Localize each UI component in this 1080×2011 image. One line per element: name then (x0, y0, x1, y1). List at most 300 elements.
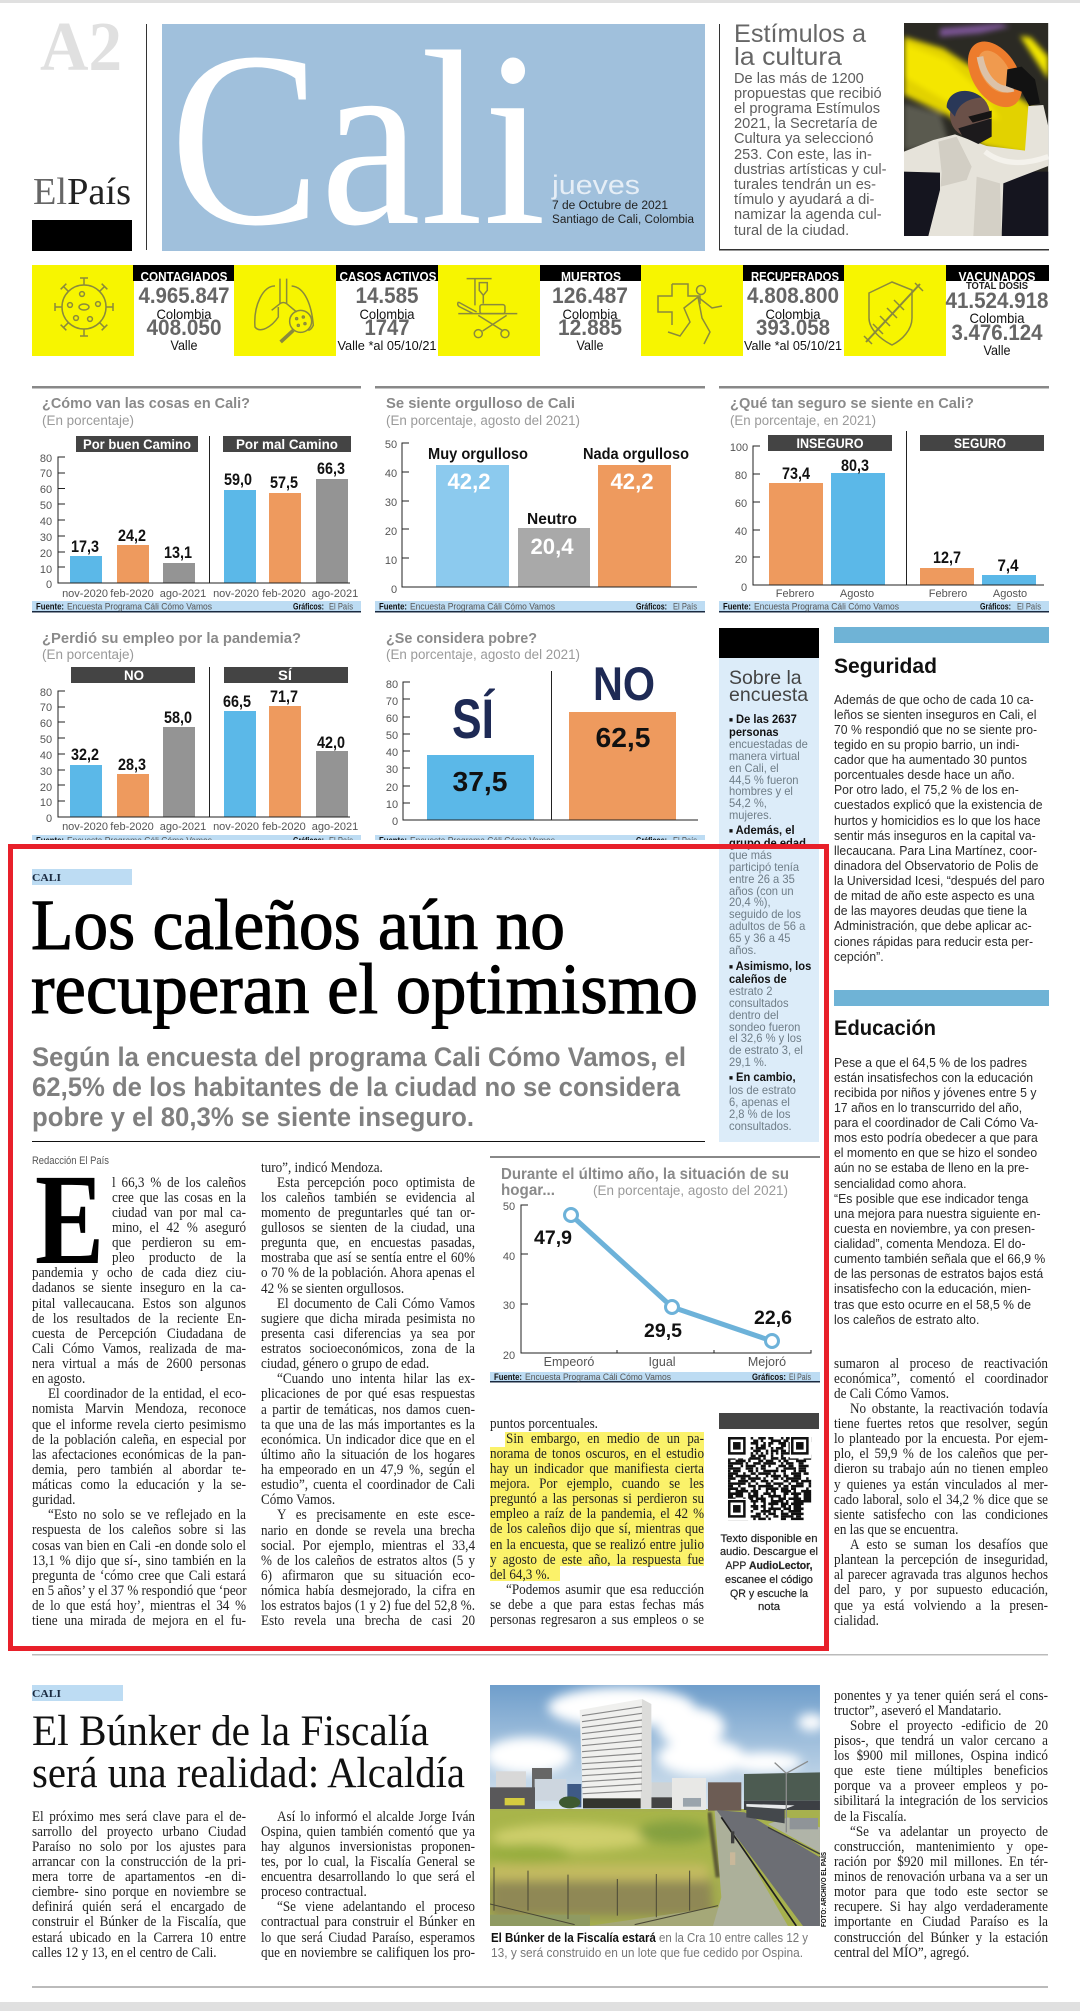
article column 2: estudio”, cuenta el coordinador de Cali (261, 1477, 475, 1493)
bunker story column 3: ponentes y ya tener quién será el cons- (834, 1688, 1048, 1704)
survey point 3: 29,1 %. (729, 1055, 767, 1069)
educacion body: “Es posible que ese indicador tenga (834, 1191, 1028, 1206)
chart title: (En porcentaje, agosto del 2021) (593, 1183, 788, 1198)
value labels: 20,4 (530, 534, 574, 559)
seguridad body: Además de que ocho de cada 10 ca- (834, 692, 1034, 706)
survey point 4: 6, apenas el (729, 1095, 790, 1109)
survey point 2: que más (729, 848, 772, 862)
survey point 3: caleños de (729, 972, 787, 986)
article column 4: en las que se encuentra. (834, 1522, 958, 1538)
culture body text: 2021, la Secretaría de (734, 116, 878, 132)
culture heading: la cultura (734, 43, 842, 71)
value labels: 24,2 (118, 527, 146, 545)
bunker story column 3: construcción del Búnker y la estación (834, 1930, 1048, 1946)
chart title: ¿Qué tan seguro se siente en Cali? (730, 395, 974, 412)
bunker story column 1: ciembre- sino porque en noviembre se (32, 1884, 246, 1900)
value labels (782, 457, 1019, 575)
data values: 47,9 (534, 1228, 572, 1249)
bunker story column 3: sibilitará la integración de los servicios (834, 1793, 1048, 1809)
subheadline: pobre y el 80,3% se siente inseguro. (32, 1102, 474, 1132)
stat: vacunados: 3.476.124 (952, 320, 1043, 345)
main headline: Los caleños aún no (31, 885, 565, 965)
value labels: 32,2 (71, 746, 99, 764)
second headline (32, 1708, 465, 1797)
chart title: ¿Cómo van las cosas en Cali? (42, 395, 250, 412)
category labels: Neutro (527, 511, 577, 528)
axis labels: nov-2020 (62, 588, 108, 600)
article column 3: preguntó a las personas si perdieron su (490, 1491, 704, 1507)
seguridad body: tegido en su propio barrio, un indi- (834, 737, 1019, 752)
article column 2 (261, 1160, 475, 1629)
article column 2: a partir de temáticas, nos damos cuen- (261, 1402, 475, 1418)
article column 2: presenta casi diferencias ya sea por (261, 1326, 475, 1342)
axis labels: 10 (386, 799, 398, 811)
drop cap: E (35, 1148, 104, 1292)
big labels (452, 657, 655, 750)
photo: empty lot with tower (485, 1685, 825, 1926)
stat: casos activos: 14.585 (356, 283, 418, 308)
survey point 2: entre 26 a 35 (729, 872, 795, 886)
article column 1: máticas como la educación y la se- (32, 1477, 246, 1493)
main headline: recuperan el optimismo (31, 949, 698, 1029)
axis labels: 20 (735, 554, 747, 566)
survey point 1: manera virtual (729, 749, 800, 763)
educacion body: Pese a que el 64,5 % de los padres (834, 1054, 1027, 1070)
value labels (71, 460, 345, 562)
article column 3: personas regresaron a sus empleos o se (490, 1612, 704, 1628)
second section tag (32, 1685, 123, 1701)
article column 1: El coordinador de la entidad, el eco- (48, 1386, 246, 1402)
QR caption: escanee el código (725, 1574, 813, 1586)
QR caption: APP AudioLector, (726, 1560, 812, 1572)
value labels: 42,2 (448, 469, 490, 494)
bunker story column 1: mera torre de apartamentos -en di- (32, 1869, 246, 1885)
axis labels: nov-2020 (62, 821, 108, 833)
QR caption (720, 1533, 818, 1613)
chart panel: como van las cosas (32, 386, 361, 612)
educacion body: están insatisfechos con la educación (834, 1070, 1033, 1085)
data values: 22,6 (754, 1308, 792, 1329)
grass field (485, 1811, 721, 1926)
survey point 3: el 32,6 % y los (729, 1031, 802, 1045)
bunker story column 3: recupere. Si hay algo verdaderamente (834, 1899, 1048, 1915)
bunker story column 3: de la Fiscalía. (834, 1808, 907, 1824)
group headers (76, 436, 351, 452)
article column 4: plantean la percepción de inseguridad, (834, 1552, 1048, 1568)
value labels: 71,7 (270, 688, 298, 706)
article column 2: sugiere que dicha mirada pesimista no (261, 1311, 475, 1327)
icon: hospital stretcher (458, 279, 517, 338)
group headers: SÍ (278, 668, 293, 683)
educacion body: tras que esto ocurre en el 58,5 % de (834, 1296, 1031, 1312)
survey point 1: en Cali, el (729, 761, 779, 775)
QR caption: QR y escuche la (730, 1588, 809, 1600)
article column 2: Esto revela una brecha de casi 20 (261, 1613, 475, 1629)
stat: contagiados: CONTAGIADOS (140, 269, 228, 284)
stat: vacunados (844, 265, 1049, 358)
value labels: 66,5 (223, 693, 251, 711)
article column 3: en la encuesta, que se realizó entre julio (490, 1536, 704, 1552)
article column 1: nomista Marvin Mendoza, reconoce (32, 1401, 246, 1417)
stat: recuperados (641, 265, 844, 356)
survey point 3: ■ Asimismo, los (729, 959, 811, 973)
article column 2: ha empeorado en un 47,9 %, según el (261, 1462, 475, 1478)
bunker story column 3: pisos-, que tendrá un valor cercano a (834, 1733, 1048, 1749)
source bar: Encuesta Programa Cáli Cómo Vamos (410, 602, 555, 612)
source bar clipped by frame: Gráficos: (293, 836, 324, 846)
article column 3: mejora. Por ejemplo, cuando se les (490, 1476, 704, 1492)
article column 3: del 64,3 %. (490, 1567, 550, 1583)
article column 3: “Podemos asumir que esa reducción (506, 1582, 704, 1598)
axis labels: nov-2020 (213, 821, 259, 833)
axis labels: 0 (392, 816, 398, 828)
bunker story column 3: central del MÍO”, agregó. (834, 1945, 969, 1961)
educacion body: para el coordinador de Cali Cómo Va- (834, 1115, 1038, 1130)
stat: muertos: Colombia (562, 306, 618, 322)
article column 4: y quienes ya están vinculados al mer- (834, 1476, 1048, 1492)
educacion colour bar (834, 990, 1049, 1006)
culture body text: dustrias artísticas y cul- (734, 162, 886, 178)
survey point 1: mujeres. (729, 808, 772, 822)
photo caption: El Búnker de la Fiscalía estará en la Cra 10 entre calles 12 y (491, 1931, 809, 1945)
survey panel title: Sobre la (729, 667, 802, 689)
category labels (428, 446, 689, 528)
article column 2: plicaciones de por qué esas respuestas (261, 1386, 475, 1402)
culture body text: Cultura ya seleccionó (734, 131, 874, 147)
bunker story column 3: motor para que todo este sector se (834, 1884, 1048, 1900)
article column 1: mino, el 42 % aseguró (112, 1220, 246, 1236)
pedestrians (730, 1831, 735, 1865)
seguridad body: porcentuales desde hace un año. (834, 767, 1015, 782)
value labels (71, 688, 345, 774)
educacion body: mos esto podría obedecer a que para (834, 1130, 1038, 1145)
bunker story column 3: tructor”, aseveró el Mandatario. (834, 1703, 1001, 1719)
article column 1: tiene una mirada de mejora en el fu- (32, 1613, 246, 1629)
bars (427, 712, 676, 820)
chart title: ¿Se considera pobre? (386, 630, 537, 647)
article column 2: económica. Un indicador dice que en el (261, 1432, 475, 1448)
page number A2: A2 (40, 9, 122, 86)
value labels: 73,4 (782, 465, 811, 483)
article column 4: de Cali Cómo Vamos. (834, 1386, 949, 1402)
bunker story column 3 (834, 1688, 1048, 1961)
seguridad body: dinadora del Observatorio de Polis de (834, 858, 1038, 873)
article column 3: hay un indicador que manifiesta cierta (490, 1461, 704, 1477)
section masthead: Cali (162, 1, 705, 278)
survey point 2: participó tenía (729, 860, 799, 874)
category labels: Nada orgulloso (583, 446, 689, 463)
value labels: 17,3 (71, 538, 99, 556)
stat: vacunados: Valle (984, 342, 1011, 358)
value labels: 80,3 (841, 457, 869, 475)
value labels: 13,1 (164, 544, 192, 562)
educacion body: cuesta en noviembre, ya con presen- (834, 1221, 1035, 1236)
icon: lungs (255, 279, 313, 342)
article column 4: No obstante, la reactivación todavía (850, 1401, 1048, 1417)
axis labels: 80 (40, 687, 52, 699)
survey point 3: consultados (729, 996, 789, 1010)
value labels: 59,0 (224, 471, 252, 489)
axis labels: 40 (40, 516, 52, 528)
article column 2: “Cuando uno intenta hilar las ex- (277, 1371, 475, 1387)
axis labels: 0 (46, 579, 52, 591)
photo caption: 13, y será construido en un lote que fue cedido por Ospina. (491, 1946, 803, 1960)
stat: recuperados: Valle *al 05/10/21 (744, 338, 842, 353)
source bar (32, 601, 361, 612)
article column 4: que ya está volviendo a la presen- (834, 1598, 1048, 1614)
value labels: 58,0 (164, 709, 192, 727)
group headers (768, 435, 1044, 451)
stat: recuperados: Colombia (766, 306, 821, 322)
article column 2: % de los caleños de estratos altos (5 y (261, 1553, 475, 1569)
axis labels: 30 (386, 764, 398, 776)
seguridad body: leños se sienten inseguros en Cali, el (834, 707, 1036, 722)
photo: dancer with orange hat (904, 23, 1048, 237)
article column 1: cosas van bien en Cali -en donde solo el (32, 1538, 246, 1554)
educacion body: insatisfecho con la educación, mien- (834, 1281, 1031, 1296)
axis labels: 10 (40, 797, 52, 809)
subheadline: Según la encuesta del programa Cali Cómo Vamos, el (32, 1042, 686, 1072)
article column 1 (32, 1174, 247, 1629)
source bar: Gráficos: (636, 602, 667, 612)
bunker story column 1: sarrollo del proyecto urbano Ciudad (32, 1824, 246, 1840)
survey point 3 (729, 959, 811, 1069)
axis labels: 30 (40, 766, 52, 778)
seguridad colour bar (834, 627, 1049, 643)
stat: vacunados: Colombia (970, 310, 1025, 326)
article column 4: plo, el 59,9 % de los caleños que per- (834, 1446, 1048, 1462)
article column 1: cree que las cosas en la (112, 1190, 246, 1206)
stat: recuperados: 393.058 (756, 315, 830, 340)
source bar (490, 1372, 820, 1383)
educacion body: recibida por niños y jóvenes entre 5 y (834, 1085, 1036, 1100)
place: Santiago de Cali, Colombia (552, 214, 695, 226)
bunker story column 2: “Se viene adelantando el proceso (277, 1899, 475, 1915)
article column 1: pleo producto de la (112, 1250, 246, 1266)
article column 3 (490, 1416, 704, 1628)
axis labels: 70 (40, 468, 52, 480)
bunker story column 2: contractual para construir el Búnker en (261, 1914, 475, 1930)
article column 2: los caleños también se evidencia al (261, 1190, 475, 1206)
value labels: 42,0 (317, 734, 345, 752)
axis labels: 30 (503, 1300, 515, 1312)
survey point 4: consultados. (729, 1119, 792, 1133)
article column 3: puntos porcentuales. (490, 1416, 598, 1432)
survey point 3: dentro del (729, 1008, 779, 1022)
axis labels: 80 (40, 453, 52, 465)
article column 1: que el informe revela cierto pesimismo (32, 1416, 246, 1432)
photo credit: FOTO: ARCHIVO EL PAÍS (819, 1852, 828, 1927)
source bar (375, 601, 705, 612)
survey point 2: grupo de edad (729, 836, 806, 850)
bunker story column 1: calles 12 y 13, en el centro de Cali. (32, 1945, 217, 1961)
source bar clipped by frame (375, 835, 705, 840)
seguridad body: Por otro lado, el 75,2 % de los en- (834, 782, 1019, 797)
source bar clipped by frame: Gráficos: (636, 836, 667, 846)
article column 2: gullosos se sienten de la ciudad, una (261, 1220, 475, 1236)
seguridad body: la Universidad Icesi, “después del paro (834, 873, 1045, 888)
category labels: Igual (648, 1355, 676, 1369)
source bar: Gráficos: (293, 602, 324, 612)
axis labels: 30 (385, 497, 397, 509)
bunker story column 2: hay algunos inversionistas proponen- (261, 1839, 475, 1855)
culture body text (734, 70, 886, 239)
date: 7 de Octubre de 2021 (552, 200, 668, 212)
black box under logo (32, 220, 132, 251)
culture body text: turales tendrán un es- (734, 177, 876, 193)
article column 1: en agosto. (32, 1371, 85, 1387)
educacion body: una mejora para nuestra siguiente en- (834, 1206, 1041, 1221)
bunker story column 1: El próximo mes será clave para el de- (32, 1808, 246, 1824)
article column 2: Cómo Vamos. (261, 1492, 335, 1508)
survey point 2: adultos de 56 a (729, 919, 805, 933)
axis labels: feb-2020 (262, 821, 306, 833)
axis labels: ago-2021 (312, 588, 358, 600)
QR caption: nota (758, 1601, 781, 1613)
article column 2: nario en donde se revela una brecha (261, 1522, 475, 1538)
survey point 1: hombres y el (729, 784, 793, 798)
educacion body: 17 años en lo transcurrido del año, (834, 1100, 1022, 1115)
bunker story column 3: Sobre el proyecto -edificio de 20 (850, 1718, 1048, 1734)
category labels: Mejoró (748, 1355, 786, 1369)
axis labels: 80 (735, 470, 747, 482)
stat: recuperados: 4.808.800 (747, 283, 839, 308)
highlight behind paragraph (490, 1432, 704, 1581)
stat: vacunados: VACUNADOS (958, 269, 1036, 284)
big labels: SÍ (452, 687, 495, 750)
source bar clipped by frame (32, 835, 361, 840)
stat: casos activos: Colombia (360, 306, 415, 322)
green building and station (744, 1761, 820, 1832)
seguridad body: de las mayores deudas que tiene la (834, 903, 1027, 918)
survey point 2: 20,4 %), (729, 895, 771, 909)
seguridad body: sentir más inseguros en la capital va- (834, 828, 1036, 843)
data values: 29,5 (644, 1321, 682, 1342)
background buildings (490, 1768, 741, 1811)
subheadline: 62,5% de los habitantes de la ciudad no se considera (32, 1072, 681, 1102)
article column 4: cialidad. (834, 1613, 879, 1629)
article column 4: al parecer agravada tras algunos hechos (834, 1567, 1048, 1583)
culture body text: 253. Con este, las in- (734, 147, 872, 163)
source bar clipped by frame: El País (329, 836, 353, 846)
article column 4: siente satisfecho con las condiciones (834, 1507, 1048, 1523)
survey point 1 (729, 712, 808, 822)
weekday: jueves (551, 170, 640, 200)
icon: shield and syringe (864, 282, 923, 345)
article column 2: nómica había desmejorado, la cifra en (261, 1583, 475, 1599)
axis labels: 10 (385, 555, 397, 567)
axis labels (730, 442, 1027, 600)
article column 2: Y es precisamente en este esce- (277, 1507, 475, 1523)
seguridad body: cuestados explicó que la existencia de (834, 797, 1043, 812)
article column 2: estratos socioeconómicos, zona de la (261, 1341, 475, 1357)
top grey band (0, 0, 1080, 3)
survey point 1: ■ De las 2637 (729, 712, 797, 726)
article column 1: de lo que está hoy’, mientras el 34 % (32, 1598, 246, 1614)
group headers: NO (124, 668, 144, 683)
culture body text: el programa Estímulos (734, 101, 880, 117)
survey point 1: encuestadas de (729, 737, 808, 751)
survey point 1: 54,2 %, (729, 796, 767, 810)
educacion body (834, 1054, 1045, 1327)
axis labels: 60 (40, 718, 52, 730)
bunker story column 2: Así lo informó el alcalde Jorge Iván (277, 1808, 475, 1824)
survey point 3: estrato 2 (729, 984, 772, 998)
value labels: 28,3 (118, 756, 146, 774)
stat: contagiados: 4.965.847 (138, 283, 230, 308)
culture body text: namizar la agenda cul- (734, 207, 882, 223)
source bar: Fuente: (723, 602, 751, 612)
bunker story column 3: que este tiene múltiples beneficios (834, 1763, 1048, 1779)
QR code (728, 1437, 811, 1520)
group headers: Por mal Camino (236, 437, 338, 452)
bunker story column 2 (261, 1808, 475, 1961)
source bar: El País (789, 1372, 811, 1383)
stat: contagiados: 408.050 (146, 315, 222, 340)
value labels: 66,3 (317, 460, 345, 478)
bunker story column 3: “Se va adelantar un proyecto de (850, 1824, 1048, 1840)
axis labels: 0 (391, 584, 397, 596)
article column 1: dadanos se siente inseguro en la ca- (32, 1280, 246, 1296)
bunker story column 3: los $900 mil millones, Ospina indicó (834, 1748, 1048, 1764)
logo El País: ElPaís (33, 171, 131, 213)
survey point 4: los de estrato (729, 1083, 796, 1097)
second headline: será una realidad: Alcaldía (32, 1750, 465, 1797)
article column 2: Esta percepción poco optimista de (277, 1175, 475, 1191)
stat: contagiados: Colombia (156, 306, 212, 322)
survey point 2 (729, 823, 806, 957)
bunker story column 1: Paraíso no solo por los ajustes para (32, 1839, 246, 1855)
source bar: Encuesta Programa Cáli Cómo Vamos (67, 602, 212, 612)
axis labels: 20 (386, 782, 398, 794)
source bar (719, 601, 1049, 612)
stat: casos activos (234, 265, 438, 356)
axis labels: 70 (386, 696, 398, 708)
second headline: El Búnker de la Fiscalía (32, 1708, 429, 1755)
culture body text: tímulo y ayudará a di- (734, 192, 874, 208)
article column 2: turo”, indicó Mendoza. (261, 1160, 383, 1176)
axis labels: Agosto (840, 588, 874, 600)
stat: muertos: 12.885 (558, 315, 622, 340)
survey point 3: de estrato 3, el (729, 1043, 803, 1057)
educacion body: de las personas de estratos bajos está (834, 1266, 1043, 1281)
article column 2: ta que una de las más importantes es la (261, 1417, 475, 1433)
survey point 2: años. (729, 943, 756, 957)
chart subtitle: (En porcentaje, en 2021) (730, 413, 876, 428)
sidewalk and road (713, 1810, 820, 1926)
icon: cross and running person (658, 284, 722, 344)
article column 2: momento de preguntarles qué tan or- (261, 1205, 475, 1221)
article column 4: dieron su trabajo aún no tienen empleo (834, 1461, 1048, 1477)
red highlight frame (8, 844, 829, 1651)
educacion heading: Educación (834, 1017, 936, 1040)
article column 1: pital vallecaucana. Estos son algunos (32, 1296, 246, 1312)
chart panel: se considera pobre (375, 630, 705, 846)
data values (534, 1228, 792, 1342)
axis labels: 50 (40, 734, 52, 746)
article column 1: en 5 años’ y el 37 % respondió que ‘peor (32, 1583, 247, 1599)
axis labels: 50 (386, 730, 398, 742)
axis labels: feb-2020 (262, 588, 306, 600)
axis labels: 50 (40, 500, 52, 512)
article column 1: nera virtual a más de 2600 personas (32, 1356, 246, 1372)
article column 1: Cali Cómo Vamos, realizada de ma- (32, 1341, 246, 1357)
stat: muertos (438, 265, 641, 356)
axis labels: 80 (386, 679, 398, 691)
axis labels: 50 (385, 439, 397, 451)
axis labels: 60 (735, 498, 747, 510)
stat: muertos: 126.487 (552, 283, 628, 308)
